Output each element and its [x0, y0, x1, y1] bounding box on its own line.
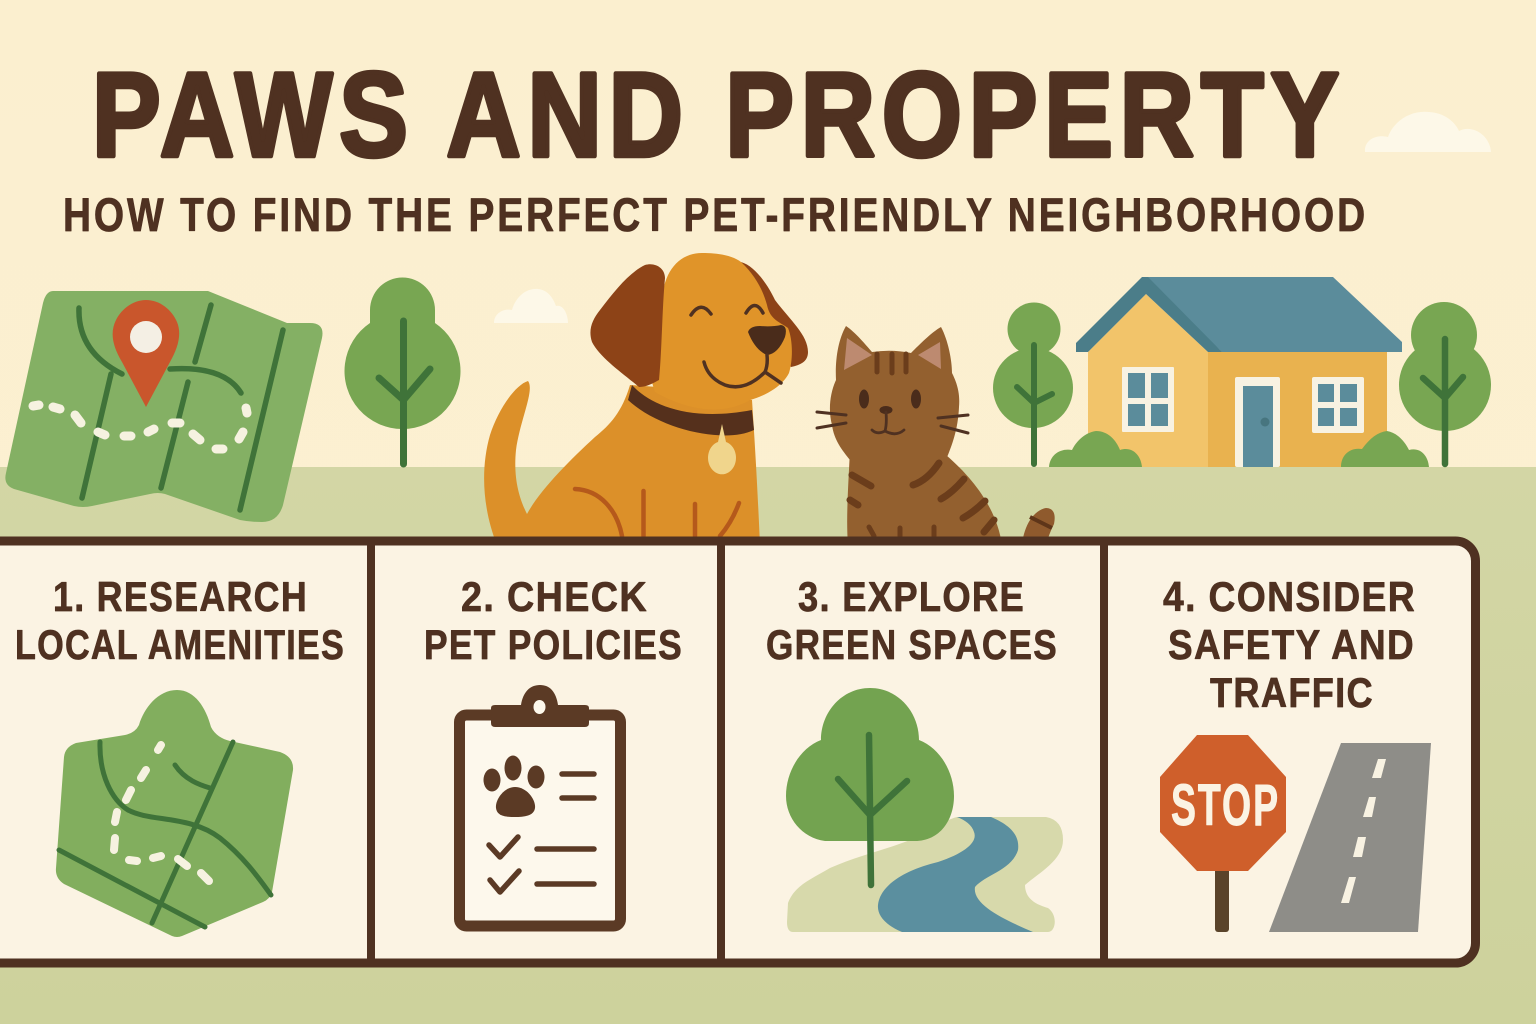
icon: cloud centre	[494, 289, 568, 323]
cat inner ears	[844, 338, 941, 370]
house left window	[1122, 367, 1174, 432]
house door	[1235, 377, 1280, 467]
paw print	[484, 756, 544, 817]
step 1 heading: 1. RESEARCH	[53, 573, 308, 620]
river bank	[787, 817, 1063, 932]
illustration: tree beside map	[345, 278, 460, 464]
step 3 heading: 3. EXPLORE	[798, 573, 1025, 620]
step 1 heading	[15, 573, 345, 668]
dog eyes, nose and mouth	[691, 306, 786, 387]
step 3 heading: GREEN SPACES	[766, 621, 1058, 668]
illustration: folded map with pin	[5, 291, 322, 522]
house front gable	[1088, 294, 1208, 467]
dog tail and body	[484, 381, 760, 545]
illustration: house	[1049, 277, 1429, 467]
dog left ear	[590, 264, 665, 387]
house gable trim	[1076, 277, 1222, 352]
step 4 heading	[1163, 573, 1416, 716]
step 4 heading: 4. CONSIDER	[1163, 573, 1416, 620]
step 2 heading: PET POLICIES	[424, 621, 683, 668]
icon: green space with river	[786, 688, 1063, 932]
illustration: tree right of house	[1399, 302, 1491, 464]
icon: road	[1269, 743, 1431, 932]
icon: neighborhood map	[56, 690, 293, 937]
dog leg lines	[575, 489, 739, 536]
dog right ear	[741, 262, 808, 367]
icon: stop sign	[1160, 735, 1286, 932]
cat body	[847, 450, 1002, 545]
tree trunk	[838, 735, 907, 885]
icon: clipboard	[460, 685, 620, 926]
title: PAWS AND PROPERTY	[92, 48, 1346, 182]
icon: cloud top right	[1365, 112, 1491, 152]
step 4	[1160, 573, 1431, 932]
step 3	[766, 573, 1063, 932]
illustration: cat	[817, 326, 1055, 545]
illustration: dog	[484, 253, 808, 545]
dog tag	[708, 424, 736, 474]
house right wall	[1208, 350, 1387, 467]
step 1	[15, 573, 345, 937]
dog collar	[628, 385, 754, 435]
icon: stop sign: STOP	[1171, 773, 1280, 838]
step 2 heading: 2. CHECK	[461, 573, 648, 620]
cat head	[830, 326, 959, 460]
step 3 heading	[766, 573, 1058, 668]
step 2	[424, 573, 683, 926]
cat face	[817, 390, 968, 434]
step 4 heading: SAFETY AND	[1168, 621, 1415, 668]
step 1 heading: LOCAL AMENITIES	[15, 621, 345, 668]
cat tail	[1022, 508, 1055, 545]
step 4 heading: TRAFFIC	[1210, 669, 1374, 716]
ground	[0, 467, 1536, 1024]
checklist	[489, 774, 594, 892]
left bush	[1049, 431, 1142, 467]
house right window	[1312, 377, 1364, 433]
map pin	[113, 300, 179, 407]
house roof	[1142, 277, 1402, 352]
right bush	[1341, 431, 1429, 467]
map pin centre	[130, 321, 162, 353]
cat stripes	[850, 354, 994, 536]
panel: four steps	[0, 541, 1476, 963]
river	[878, 817, 1033, 932]
dog head	[649, 253, 792, 409]
illustration: tree left of house	[993, 302, 1073, 464]
tree crown	[786, 688, 954, 841]
step 2 heading	[424, 573, 683, 668]
